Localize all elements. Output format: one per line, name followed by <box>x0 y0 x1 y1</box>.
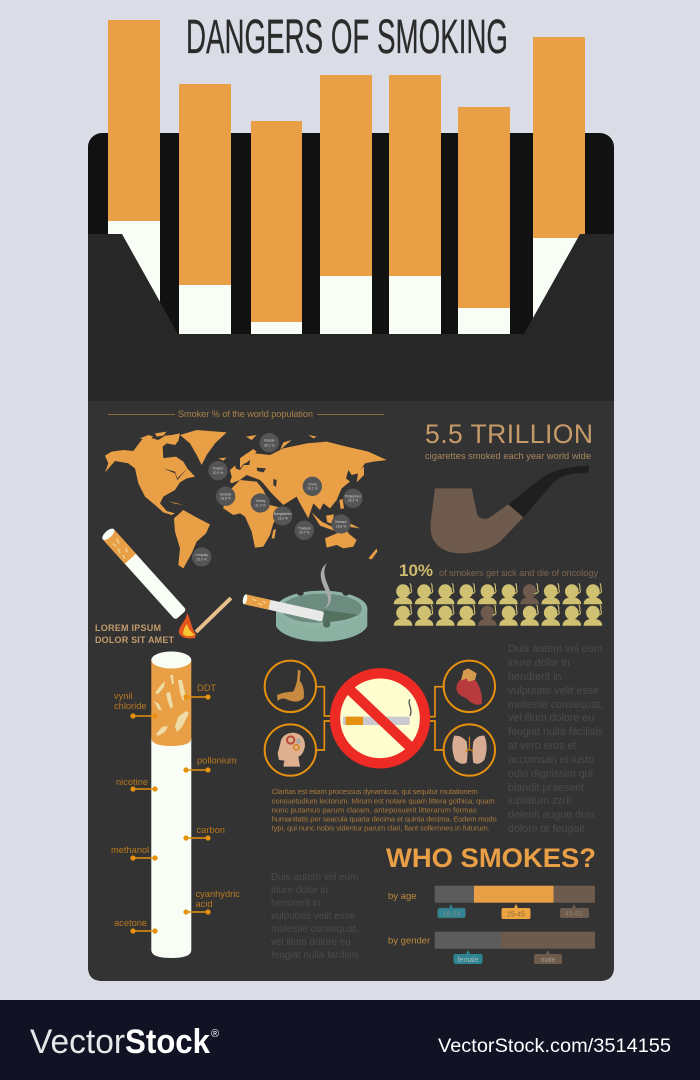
chemical labels: carbon <box>196 825 225 835</box>
footer reference: VectorStock.com/3514155 <box>438 1036 671 1057</box>
paragraph: right column <box>508 643 603 835</box>
organ circles <box>265 661 495 776</box>
chemical labels: DDT <box>197 683 216 693</box>
paragraph: right column: accumsan et iusto <box>508 754 594 766</box>
tag: 16-24 <box>438 904 466 918</box>
paragraph: claritas: Claritas est etiam processus dynamicus, qui sequitur mutationem <box>272 787 478 796</box>
paragraph: right column: Duis autem vel eum <box>508 643 603 655</box>
pack front flap <box>88 234 614 401</box>
large cigarette with chemical labels <box>111 652 240 958</box>
large statistic: 5.5 TRILLION <box>425 419 593 449</box>
country bubbles: 39.1 % <box>264 443 275 447</box>
paragraph: lower column: Duis autem vel eum <box>271 872 358 883</box>
paragraph: lower column: vulputate velit esse <box>271 911 355 922</box>
paragraph: right column: molestie consequat, <box>508 699 603 711</box>
cigarettes sticking out of the pack <box>108 20 585 334</box>
tag: female <box>454 950 482 964</box>
paragraph: lower column: iriure dolor in <box>271 885 328 896</box>
country bubbles: 28.1 % <box>307 487 318 491</box>
paragraph: claritas: humanitatis per seacula quarta decima et quinta decima. Eodem modo <box>272 814 497 823</box>
paragraph: lower column: vel illum dolore eu <box>271 937 351 948</box>
paragraph: right column: luptatum zzril <box>508 795 571 807</box>
footer logo: Stock <box>125 1023 210 1061</box>
footer logo: ® <box>211 1028 219 1040</box>
paragraph: lower column: hendrerit in <box>271 898 320 909</box>
tag: male: male <box>540 957 556 964</box>
cigarette pack back <box>88 133 614 981</box>
paragraph: right column: hendrerit in <box>508 671 562 683</box>
tag: male <box>534 950 562 964</box>
icon: heart <box>456 668 482 705</box>
oncology statistic: of smokers get sick and die of oncology <box>439 568 598 578</box>
chemical labels: acetone <box>114 918 147 928</box>
country bubbles: Uruguay <box>195 553 208 557</box>
paragraph: right column: odio dignissim qui <box>508 768 593 780</box>
oncology statistic <box>399 561 598 580</box>
country bubbles: Thailand <box>298 526 311 530</box>
chemical labels <box>111 683 240 928</box>
icon: tilted cigarette <box>100 527 187 620</box>
country bubbles <box>192 433 363 567</box>
heading: who smokes: WHO SMOKES? <box>386 843 596 873</box>
paragraph: right column: feugiat nulla facilisis <box>508 726 603 738</box>
country bubbles: China <box>308 482 317 486</box>
paragraph: claritas: typi, qui nunc nobis videntur parum clari, fiant sollemnes in futurum. <box>272 823 490 832</box>
statistic caption: cigarettes smoked each year world wide <box>425 451 591 461</box>
tag: 16-24: 16-24 <box>443 911 461 918</box>
country bubbles: Turkey <box>255 499 266 503</box>
paragraph: lower column: molestie consequat, <box>271 924 359 935</box>
country bubbles: 30.3 % <box>213 471 223 475</box>
chart: by gender: by gender <box>388 936 430 946</box>
icon: ashtray cigarette <box>242 594 324 622</box>
chemical labels: pollonium <box>197 756 237 766</box>
paragraph: right column: iriure dolor in <box>508 657 570 669</box>
tag: 25-45: 25-45 <box>507 912 525 918</box>
country bubbles: 23.7 % <box>299 531 310 535</box>
icon: head with gears <box>278 733 305 767</box>
paragraph: right column: blandit praesent <box>508 782 584 794</box>
chart: by age <box>388 886 595 919</box>
paragraph: claritas: consuetudium lectorum. Mirum est notare quam littera gothica, quam <box>272 796 495 805</box>
paragraph: right column: vel illum dolore eu <box>508 712 594 724</box>
paragraph: lower column <box>271 872 359 961</box>
icon: smoke <box>321 563 331 609</box>
paragraph: right column: vulputate velit esse <box>508 685 599 697</box>
chemical labels: acid <box>196 899 213 909</box>
footer bar <box>0 1000 700 1080</box>
country bubbles: Vietnam <box>335 520 347 524</box>
paragraph: claritas <box>272 787 497 832</box>
health effects diagram <box>265 661 495 776</box>
country bubbles: 23.0 % <box>277 516 288 520</box>
country bubbles: Poland <box>213 467 223 471</box>
oncology statistic: 10% <box>399 561 433 580</box>
tag: 45-65 <box>560 904 589 918</box>
world map <box>105 430 387 568</box>
chemical labels: cyanhydric <box>196 889 240 899</box>
text: lorem ipsum: DOLOR SIT AMET <box>95 635 174 645</box>
heading: world population: Smoker % of the world population <box>178 409 313 419</box>
pack lower panel <box>88 401 614 981</box>
footer logo <box>30 1023 219 1061</box>
paragraph: lower column: feugiat nulla facilisis <box>271 950 359 961</box>
chemical leader lines <box>130 694 211 934</box>
chemical labels: chloride <box>114 701 147 711</box>
country bubbles: Ukraine <box>220 492 232 496</box>
connector lines <box>317 687 443 750</box>
country bubbles: 31.2 % <box>255 503 266 507</box>
paragraph: claritas: nunc putamus parum claram, anteposuerit litterarum formas <box>272 805 477 814</box>
no smoking sign <box>335 673 425 763</box>
chemical labels: nicotine <box>116 777 148 787</box>
country bubbles: Russia <box>264 438 275 442</box>
icon: match and flame <box>179 598 231 638</box>
text: lorem ipsum: LOREM IPSUM <box>95 623 161 633</box>
icon: lungs <box>452 736 487 764</box>
pictogram: smokers <box>394 583 602 626</box>
footer logo: Vector <box>30 1023 125 1061</box>
tag: 25-45 <box>502 904 530 919</box>
country bubbles: 28.8 % <box>220 497 231 501</box>
country bubbles: 28.3 % <box>348 499 358 503</box>
icon: stomach <box>277 670 304 702</box>
country bubbles: 23.8 % <box>336 524 346 528</box>
cigarette body <box>151 652 191 958</box>
country bubbles: Bangladesh <box>274 512 292 516</box>
chart: by age: by age <box>388 891 417 902</box>
tag: 45-65: 45-65 <box>565 911 583 918</box>
paragraph: right column: at vero eros et <box>508 740 576 752</box>
paragraph: right column: dolore te feugait <box>508 823 585 835</box>
chart: by gender <box>388 932 595 964</box>
paragraph: right column: delenit augue duis <box>508 809 595 821</box>
icon: ashtray <box>276 591 367 642</box>
country bubbles: 25.0 % <box>196 557 207 561</box>
tag: female: female <box>457 957 479 964</box>
text: lorem ipsum <box>95 623 174 645</box>
country bubbles: Philippines <box>345 494 361 498</box>
icon: pipe <box>431 466 589 553</box>
chemical labels: methanol <box>111 845 149 855</box>
chemical labels: vynil <box>114 691 133 701</box>
